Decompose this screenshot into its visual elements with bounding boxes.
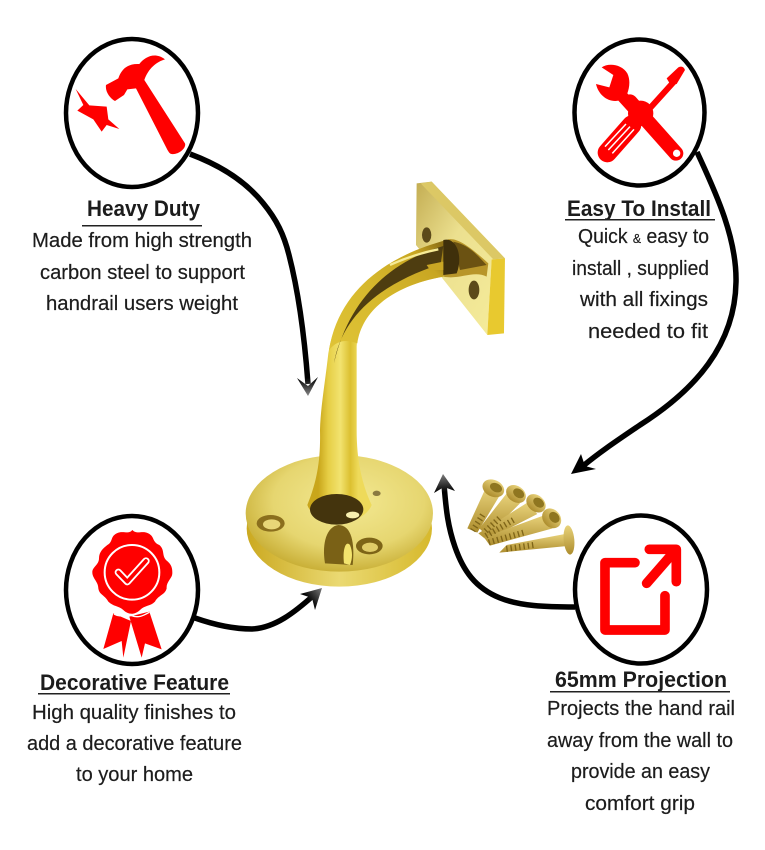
panel: easy to install [565, 40, 715, 343]
icon: projection arrow in circle [575, 516, 707, 664]
body text: needed to fit [588, 320, 708, 343]
heading: Easy To Install [567, 196, 711, 221]
arrow: decorative feature to base [195, 588, 322, 629]
body text: install , supplied [572, 257, 709, 280]
body text: Made from high strength [32, 229, 252, 252]
wall plate [416, 182, 505, 335]
heading: 65mm Projection [555, 667, 727, 692]
body text: with all fixings [579, 288, 708, 311]
icon: hammer in circle [66, 39, 198, 187]
body text: Quick & easy to [578, 225, 709, 248]
body text [32, 229, 252, 315]
body text [27, 701, 242, 786]
product photo: brass handrail bracket [246, 182, 505, 587]
panel: decorative feature [27, 516, 242, 786]
body text: handrail users weight [46, 292, 238, 315]
body text [572, 225, 709, 343]
body text [547, 697, 735, 815]
body text: away from the wall to [547, 729, 733, 752]
body text: carbon steel to support [40, 261, 245, 284]
arrow: easy to install to screws [571, 152, 736, 474]
round base plate [246, 455, 433, 587]
heading: Heavy Duty [87, 196, 201, 221]
heading: Decorative Feature [40, 670, 229, 695]
body text: provide an easy [571, 760, 711, 783]
curved arm, stem and dome [307, 240, 459, 522]
screws [467, 476, 576, 555]
panel: heavy duty [32, 39, 252, 315]
body text: to your home [76, 763, 193, 786]
dome and lower foot highlights [310, 494, 363, 565]
icon: rosette badge in circle [66, 516, 198, 664]
arrow: projection to base [434, 474, 575, 607]
body text: Projects the hand rail [547, 697, 735, 720]
body text: comfort grip [585, 792, 695, 815]
arrow: heavy duty to bracket [190, 154, 318, 396]
icon: wrench and screwdriver in circle [574, 40, 704, 186]
body text: add a decorative feature [27, 732, 242, 755]
panel: 65mm projection [547, 516, 735, 815]
body text: High quality finishes to [32, 701, 236, 724]
